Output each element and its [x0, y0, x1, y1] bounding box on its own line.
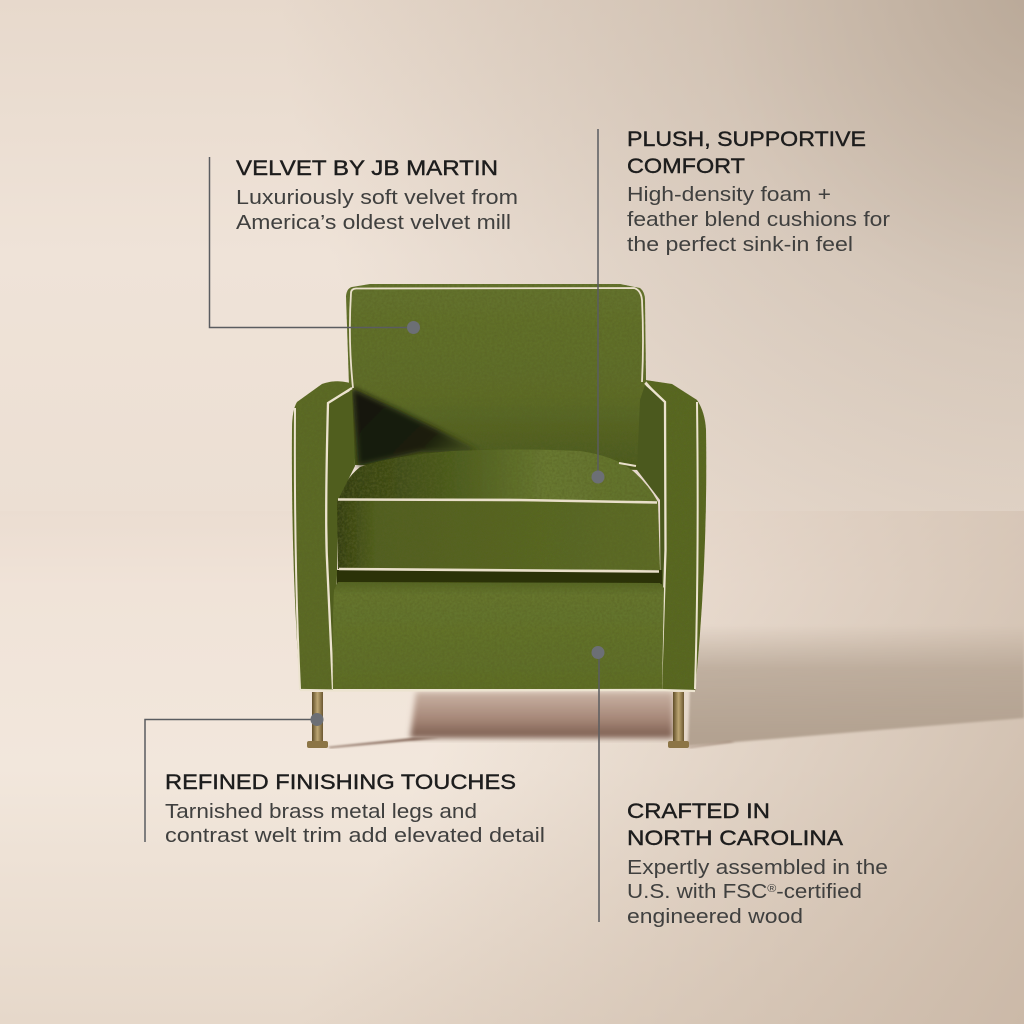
chair right arm: [637, 380, 706, 691]
text block: crafted in North Carolina: -certified: [776, 881, 862, 903]
right brass leg: [668, 692, 689, 748]
text block: crafted in North Carolina: engineered wood: [627, 906, 803, 928]
text block: crafted in North Carolina: U.S. with FSC: [627, 881, 753, 903]
text block: crafted in North Carolina: CRAFTED IN: [627, 800, 770, 823]
text block: crafted in North Carolina: NORTH CAROLINA: [627, 827, 843, 850]
bottom welt trim: [300, 690, 695, 691]
left brass leg: [307, 692, 328, 748]
text block: velvet by JB Martin: Luxuriously soft velvet from: [236, 187, 518, 209]
text block: velvet by JB Martin: America’s oldest velvet mill: [236, 212, 511, 234]
text block: plush supportive comfort: COMFORT: [627, 155, 745, 178]
seat cushion front: [337, 500, 660, 570]
text block: refined finishing touches: [165, 771, 545, 847]
background: wall: [0, 0, 1024, 512]
text block: velvet by JB Martin: VELVET BY JB MARTIN: [236, 157, 498, 180]
seat welt trim: [338, 463, 659, 572]
text block: crafted in North Carolina: ®: [767, 883, 776, 895]
chair back cushion: [346, 284, 646, 470]
text block: plush supportive comfort: High-density foam +: [627, 184, 831, 206]
seat cushion top: [338, 450, 658, 502]
text block: refined finishing touches: contrast welt trim add elevated detail: [165, 825, 545, 847]
callout line: finishing touches: [145, 713, 324, 842]
cast shadow on floor: [328, 610, 1024, 748]
text block: velvet by JB Martin: [236, 157, 518, 234]
text block: crafted in North Carolina: [627, 800, 888, 928]
chair base panel: [333, 582, 664, 689]
text block: plush supportive comfort: the perfect sink-in feel: [627, 234, 853, 256]
text block: refined finishing touches: Tarnished brass metal legs and: [165, 801, 477, 823]
callout line: velvet: [210, 157, 420, 334]
callout line: crafted: [592, 646, 604, 922]
text block: plush supportive comfort: feather blend cushions for: [627, 209, 890, 231]
armchair: [292, 284, 706, 748]
text block: crafted in North Carolina: Expertly assembled in the: [627, 857, 888, 879]
text block: plush supportive comfort: [627, 128, 890, 256]
background: floor: [0, 511, 1024, 1024]
callout line: comfort: [592, 129, 604, 484]
text block: refined finishing touches: REFINED FINISHING TOUCHES: [165, 771, 516, 794]
text block: plush supportive comfort: PLUSH, SUPPORTIVE: [627, 128, 866, 151]
chair left arm: [292, 381, 355, 690]
gap under cushion: [337, 570, 662, 584]
